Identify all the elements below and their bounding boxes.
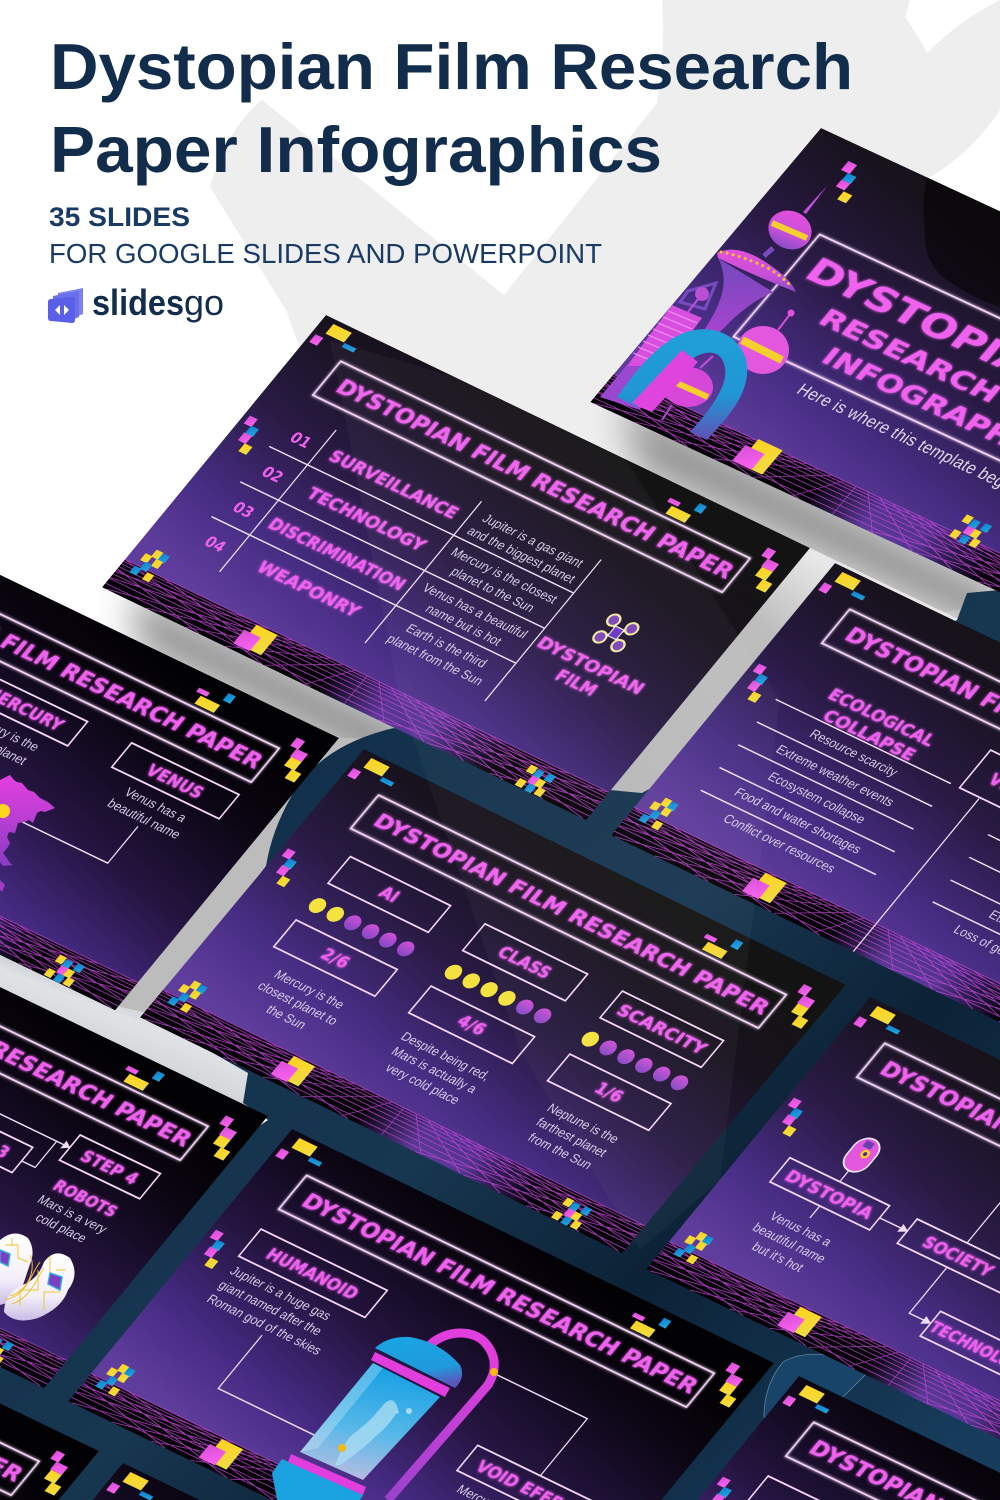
list items: Ecosystem collapse bbox=[765, 769, 869, 827]
logo wordmark: go bbox=[184, 282, 224, 323]
icon: capsule face bbox=[838, 1134, 885, 1176]
illustration: circuit brains bbox=[0, 1233, 75, 1320]
column: AI: Mercury is the bbox=[271, 967, 348, 1012]
subtitle: FOR GOOGLE SLIDES AND POWERPOINT bbox=[49, 238, 602, 269]
slide: partial lower right bbox=[420, 1301, 1000, 1500]
slide: partial bottom bbox=[0, 1388, 762, 1500]
pale strip under map slide bbox=[0, 950, 268, 1118]
slide: table of topics bbox=[0, 240, 965, 895]
slide count: 35 SLIDES bbox=[49, 202, 190, 232]
table numbers: 02 bbox=[258, 463, 287, 486]
text: robots description bbox=[23, 1192, 111, 1250]
list items: Extreme weather events bbox=[773, 742, 898, 809]
table descriptions: and the biggest planet bbox=[464, 523, 579, 586]
box: step 4 bbox=[59, 1135, 160, 1199]
illustration: futuristic tower city bbox=[600, 186, 827, 440]
column: AI: the Sun bbox=[263, 1002, 310, 1032]
text: humanoid description: Roman god of the skies bbox=[204, 1291, 325, 1358]
text: Venus description: Venus has a bbox=[121, 784, 191, 825]
box: Society bbox=[897, 1219, 1000, 1293]
page title bbox=[50, 30, 853, 186]
logo icon bbox=[48, 288, 83, 323]
table numbers bbox=[200, 429, 316, 556]
text: Dystopia description: Venus has a bbox=[767, 1208, 836, 1249]
column: Scarcity: farthest planet bbox=[533, 1114, 611, 1160]
text: humanoid description: giant named after the bbox=[215, 1277, 326, 1338]
slide: steps bbox=[0, 808, 423, 1463]
cover pixel decorations bbox=[732, 161, 992, 548]
rating dots bbox=[305, 896, 418, 959]
list items: Food and water shortages bbox=[731, 785, 865, 856]
text: Venus description: beautiful name bbox=[104, 796, 184, 842]
box: Society: SOCIETY bbox=[918, 1232, 999, 1281]
logo wordmark: slides bbox=[92, 282, 184, 323]
side label: DYSTOPIAN bbox=[533, 632, 649, 698]
map of Asia bbox=[0, 775, 55, 892]
illustration: stasis pod bbox=[272, 1333, 498, 1500]
box: Mercury bbox=[0, 670, 88, 746]
box: humanoid bbox=[239, 1229, 387, 1317]
flow connectors bbox=[782, 1141, 1000, 1331]
table topics: DISCRIMINATION bbox=[264, 514, 411, 594]
slide: flow chart bbox=[491, 922, 1000, 1500]
text: humanoid description: Jupiter is a huge gas bbox=[227, 1263, 335, 1323]
table descriptions bbox=[378, 509, 591, 691]
column: Class: Mars is actually a bbox=[388, 1044, 481, 1096]
table topics: SURVEILLANCE bbox=[325, 446, 464, 523]
column: Scarcity: 1/6 bbox=[590, 1078, 629, 1106]
text: humanoid description bbox=[204, 1263, 348, 1358]
heading: robots: ROBOTS bbox=[48, 1176, 122, 1221]
slide title: DYSTOPIAN FILM RESEARCH PAPER bbox=[369, 808, 776, 1020]
table descriptions: Jupiter is a gas giant bbox=[479, 511, 587, 570]
box: void effect bbox=[457, 1445, 603, 1500]
text: Dystopia description: but it's hot bbox=[749, 1239, 807, 1275]
column: Scarcity bbox=[504, 991, 724, 1182]
page title: Dystopian Film Research bbox=[50, 30, 853, 103]
column: Scarcity: Neptune is the bbox=[544, 1100, 623, 1146]
connector bbox=[6, 777, 138, 863]
text: Dystopia description: beautiful name bbox=[749, 1220, 829, 1266]
side label: FILM bbox=[551, 665, 602, 700]
box: Venus: VENUS bbox=[141, 760, 209, 802]
column: Class: 4/6 bbox=[453, 1011, 491, 1039]
table numbers: 04 bbox=[200, 533, 230, 556]
rating dots bbox=[441, 962, 555, 1026]
list items: Conflict over resources bbox=[720, 811, 839, 876]
drop shadow: cover slide bbox=[620, 400, 1000, 640]
slide: partial lower left bbox=[0, 1143, 254, 1500]
column: Scarcity: from the Sun bbox=[525, 1130, 596, 1172]
text: Venus description bbox=[104, 782, 196, 842]
text: robots description: Mars is a very bbox=[34, 1192, 111, 1236]
table descriptions: planet from the Sun bbox=[384, 631, 487, 688]
grey band between upper slides bbox=[590, 548, 960, 800]
table rules bbox=[180, 412, 602, 701]
connectors bbox=[218, 1282, 587, 1500]
slide: humanoid bbox=[0, 1054, 928, 1500]
table descriptions: Venus has a beautiful bbox=[419, 580, 531, 641]
box: step 4: STEP 4 bbox=[76, 1146, 144, 1189]
box: Venus bbox=[112, 743, 239, 819]
heading: ecological collapse bbox=[810, 684, 940, 767]
text: robots description: cold place bbox=[32, 1210, 90, 1245]
column: Scarcity: SCARCITY bbox=[612, 1000, 712, 1059]
cover title frame bbox=[730, 232, 1000, 464]
column: Class bbox=[366, 923, 588, 1115]
column: Class: Despite being red, bbox=[398, 1029, 494, 1083]
table descriptions: planet to the Sun bbox=[448, 564, 538, 615]
table topics: WEAPONRY bbox=[253, 557, 366, 621]
slide title: DYSTOPIAN FILM RESEARCH PAPER bbox=[331, 375, 739, 584]
box: Dystopia bbox=[770, 1158, 890, 1230]
icon: drone bbox=[591, 613, 641, 653]
table numbers: 03 bbox=[228, 498, 258, 522]
background swoosh shape bbox=[210, 0, 1000, 700]
column: AI: closest planet to bbox=[255, 978, 341, 1028]
table descriptions: Earth is the third bbox=[403, 621, 491, 670]
rating dots bbox=[578, 1029, 692, 1093]
empty box bbox=[746, 1476, 895, 1500]
column: Class: very cold place bbox=[382, 1060, 463, 1107]
list items bbox=[713, 717, 1000, 989]
arrowheads bbox=[849, 1224, 982, 1328]
table topics: TECHNOLOGY bbox=[303, 483, 432, 555]
step connectors bbox=[0, 1086, 66, 1172]
navy backdrop bbox=[0, 590, 1000, 1500]
column: AI: AI bbox=[375, 882, 404, 906]
box: humanoid: HUMANOID bbox=[262, 1244, 364, 1303]
text: Dystopia description bbox=[738, 1206, 841, 1280]
table descriptions: name but is hot bbox=[422, 601, 506, 649]
slide: map bbox=[0, 430, 494, 1085]
box: step 3 bbox=[0, 1108, 33, 1173]
table descriptions: Mercury is the closest bbox=[448, 544, 561, 607]
slide title: DYSTOPIAN FILM RESEARCH PAPER bbox=[297, 1189, 704, 1398]
arrowhead bbox=[60, 1141, 73, 1152]
translucent swoosh over slides bbox=[330, 340, 780, 1250]
column: Class: CLASS bbox=[493, 942, 557, 982]
slide: cover bbox=[590, 128, 1000, 592]
table topics bbox=[235, 444, 468, 629]
slide: ratings bbox=[0, 673, 1000, 1329]
column: AI: 2/6 bbox=[316, 944, 355, 972]
box: VS bbox=[960, 750, 1000, 881]
thin arc on backdrop bbox=[764, 1354, 870, 1440]
list rules bbox=[649, 699, 1000, 1045]
page title: Paper Infographics bbox=[50, 113, 662, 186]
slide: ecological collapse bbox=[456, 488, 1000, 1143]
table numbers: 01 bbox=[286, 429, 316, 452]
column: AI bbox=[231, 856, 451, 1048]
heading: ecological collapse: COLLAPSE bbox=[819, 705, 921, 764]
grey band beside map slide bbox=[100, 738, 400, 1020]
list items: Resource scarcity bbox=[807, 726, 902, 780]
box: Dystopia: DYSTOPIA bbox=[781, 1166, 878, 1223]
side label bbox=[518, 632, 649, 716]
drop shadow: table slide bbox=[130, 590, 600, 860]
heading: ecological collapse: ECOLOGICAL bbox=[824, 684, 940, 750]
